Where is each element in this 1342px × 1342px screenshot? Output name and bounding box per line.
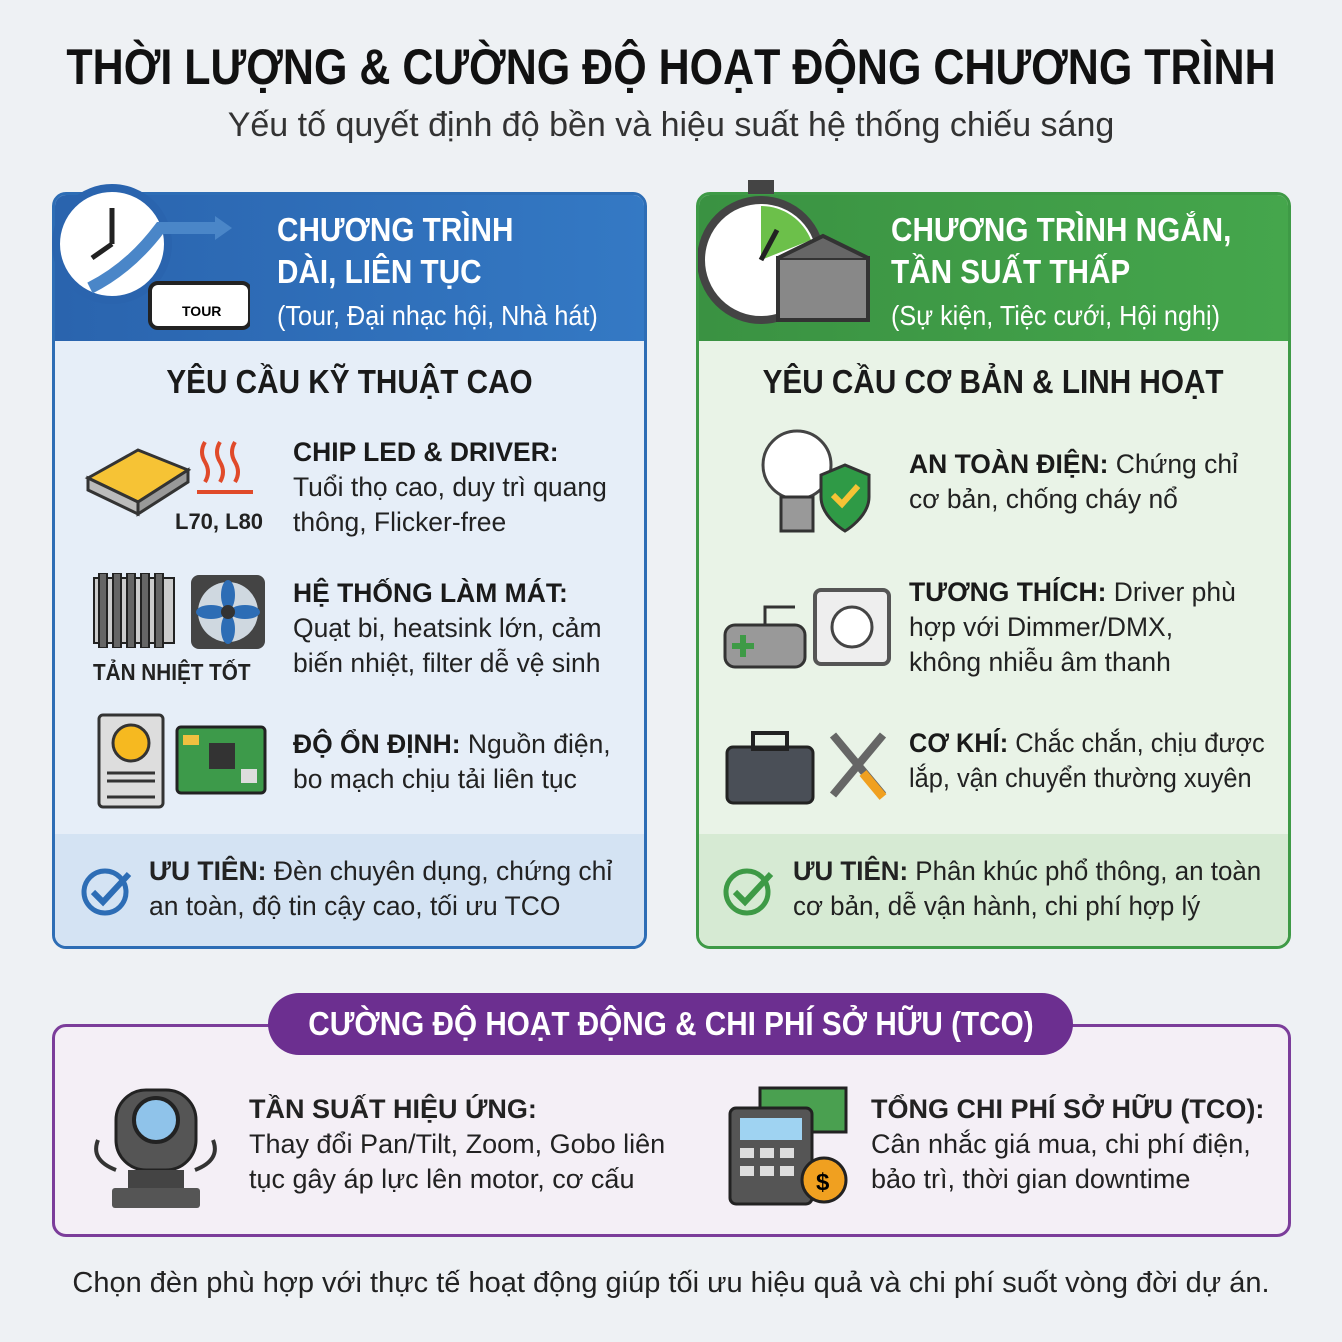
icon: check [82,868,132,916]
item: stability: bo mạch chịu tải liên tục [293,764,577,794]
item: compatibility: TƯƠNG THÍCH: Driver phù [909,577,1236,607]
header: short programs: TẦN SUẤT THẤP [891,253,1130,290]
footer: priority: cơ bản, dễ vận hành, chi phí hợp lý [793,891,1200,921]
panel: long programs [52,192,647,949]
icon: moving head [94,1088,217,1208]
icon: circuit board [176,726,266,794]
footer: priority: ƯU TIÊN: Đèn chuyên dụng, chứng chỉ [149,856,612,886]
header: short programs: (Sự kiện, Tiệc cưới, Hội nghị) [891,300,1220,331]
panel: intensity & TCO [52,1024,1291,1237]
item: compatibility: hợp với Dimmer/DMX, [909,612,1173,642]
panel: short programs [696,192,1291,949]
text: TCO: Cân nhắc giá mua, chi phí điện, [871,1129,1251,1159]
header: short programs [699,195,1288,341]
text: effect frequency: Thay đổi Pan/Tilt, Zoom, Gobo liên [249,1129,665,1159]
icon: power supply [98,714,164,808]
text: effect frequency: TẦN SUẤT HIỆU ỨNG: [249,1094,537,1124]
text: TCO: TỔNG CHI PHÍ SỞ HỮU (TCO): [871,1094,1264,1124]
footer: priority [55,834,644,946]
icon: led chip [84,448,192,517]
icon: heatsink [93,573,175,648]
icon: stopwatch and stage [698,180,870,324]
header: long programs: DÀI, LIÊN TỤC [277,253,482,290]
text: TCO: bảo trì, thời gian downtime [871,1164,1190,1194]
heading pill: intensity & TCO: CƯỜNG ĐỘ HOẠT ĐỘNG & CHI PHÍ SỞ HỮU (TCO) [308,1005,1034,1042]
heading: high technical requirements: YÊU CẦU KỸ THUẬT CAO [166,363,533,400]
item: compatibility [909,577,1236,677]
item: electrical safety: cơ bản, chống cháy nổ [909,484,1178,514]
icon labels: L70, L80 [175,509,263,534]
footer: priority: an toàn, độ tin cậy cao, tối ưu TCO [149,891,560,921]
item: cooling: Quạt bi, heatsink lớn, cảm [293,613,602,643]
header: long programs: (Tour, Đại nhạc hội, Nhà hát) [277,300,598,331]
text: effect frequency: tục gây áp lực lên motor, cơ cấu [249,1164,634,1194]
title: THỜI LƯỢNG & CƯỜNG ĐỘ HOẠT ĐỘNG CHƯƠNG TRÌNH [66,39,1276,95]
footer note: Chọn đèn phù hợp với thực tế hoạt động giúp tối ưu hiệu quả và chi phí suốt vòng đời dự án. [72,1267,1270,1299]
icon: controller and dimmer [724,588,891,668]
heading pill: intensity & TCO [268,993,1073,1055]
item: cooling: HỆ THỐNG LÀM MÁT: [293,578,568,608]
text: TCO [871,1094,1264,1194]
footer: priority [699,834,1288,946]
text: effect frequency [249,1094,665,1194]
item: electrical safety [909,448,1238,514]
header: long programs: CHƯƠNG TRÌNH [277,211,513,248]
item: chip led: Tuổi thọ cao, duy trì quang [293,472,607,502]
item: mechanical [909,728,1265,793]
icon: calculator and money: $ [816,1169,830,1196]
item: chip led [293,437,607,537]
item: electrical safety: AN TOÀN ĐIỆN: Chứng chỉ [909,449,1238,479]
panel: long programs: TẢN NHIỆT TỐT [93,659,251,685]
heading: basic requirements: YÊU CẦU CƠ BẢN & LINH HOẠT [763,363,1224,400]
footer: priority: ƯU TIÊN: Phân khúc phổ thông, an toàn [793,856,1261,886]
item: mechanical: lắp, vận chuyển thường xuyên [909,763,1252,793]
icon: heat [197,441,253,494]
item: cooling [293,578,602,678]
header: short programs: CHƯƠNG TRÌNH NGẮN, [891,211,1231,248]
icon: clock and bus [52,184,250,330]
icon: bulb with shield [762,430,870,533]
item: cooling: biến nhiệt, filter dễ vệ sinh [293,648,600,678]
item: compatibility: không nhiễu âm thanh [909,647,1171,677]
item: stability: ĐỘ ỔN ĐỊNH: Nguồn điện, [293,729,611,759]
item: stability [293,728,611,794]
subtitle: Yếu tố quyết định độ bền và hiệu suất hệ thống chiếu sáng [228,106,1114,144]
icon: fan [191,575,265,649]
icon: clock and bus: TOUR [182,303,221,319]
item: chip led: thông, Flicker-free [293,507,506,537]
icon: toolbox and tools [726,731,886,804]
item: mechanical: CƠ KHÍ: Chắc chắn, chịu được [909,728,1265,758]
icon: check [724,868,774,916]
header: long programs [55,195,644,341]
icon: calculator and money [728,1086,848,1206]
item: chip led: CHIP LED & DRIVER: [293,437,559,467]
